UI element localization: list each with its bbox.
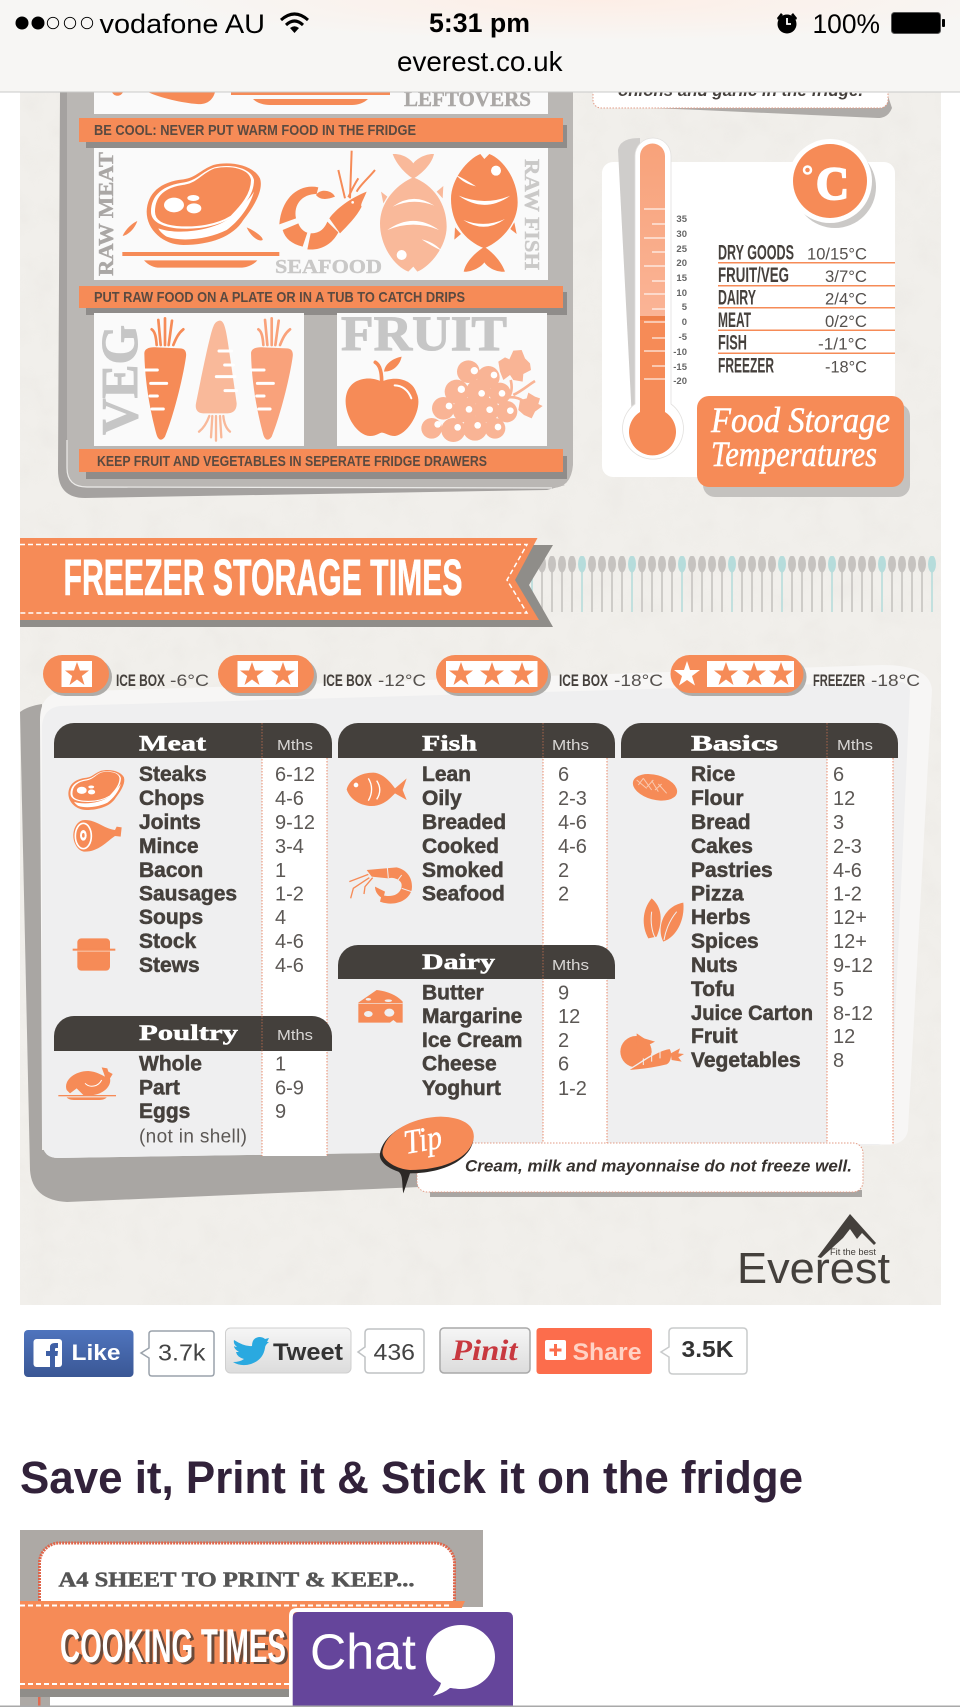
icon: herb leaves	[644, 898, 684, 942]
label ice box -18: -18°C	[614, 671, 663, 690]
fish items: Oily	[422, 787, 462, 810]
panel: freezer table backing shadow	[20, 704, 420, 1202]
header meat	[54, 723, 332, 758]
url: everest.co.uk	[397, 46, 563, 77]
scale labels: -20	[673, 376, 687, 387]
heading: save it: Save it, Print it & Stick it on the fridge	[20, 1452, 803, 1503]
scale labels: 0	[682, 317, 687, 328]
banner: freezer storage times: FREEZER STORAGE TIMES	[64, 549, 462, 606]
meat items: 9-12	[275, 812, 315, 834]
dotted card	[40, 1543, 454, 1610]
fish items: Smoked	[422, 859, 504, 882]
logo: everest: Everest	[737, 1244, 890, 1293]
icon: speech bubble	[426, 1625, 495, 1696]
meat items: Soups	[139, 906, 203, 929]
meat items: 4-6	[275, 788, 304, 810]
count: tweets: 436	[374, 1339, 415, 1365]
meat items: 3-4	[275, 836, 304, 858]
button: share: Share	[572, 1339, 642, 1366]
count: tweets	[358, 1329, 424, 1373]
icon: shrimp small	[349, 867, 412, 904]
thumbnail caption: A4 SHEET TO PRINT & KEEP...	[58, 1568, 414, 1592]
shelf 2: raw meat and fish panel	[94, 145, 548, 280]
basics items: Rice	[691, 763, 735, 786]
temperature table: -18°C	[825, 358, 867, 376]
dairy items: 1-2	[558, 1078, 587, 1100]
table: dairy	[338, 945, 615, 1100]
meat items: Stews	[139, 954, 200, 977]
panel: veg: VEG	[92, 325, 149, 435]
panel: veg	[92, 313, 304, 446]
strip: raw food	[79, 286, 563, 308]
header fish	[338, 723, 615, 758]
poultry items: 6-9	[275, 1078, 304, 1100]
temperature table: FISH	[718, 332, 747, 354]
basics items	[691, 763, 873, 1072]
table: meat	[54, 723, 332, 977]
basics items: Pastries	[691, 859, 773, 882]
decorative spoons row	[527, 556, 937, 612]
scale labels: 20	[676, 258, 687, 269]
scale labels: 30	[676, 229, 687, 240]
meat items: 1-2	[275, 884, 304, 906]
signal dots	[16, 16, 93, 30]
basics items: 4-6	[833, 860, 862, 882]
fish items: Breaded	[422, 811, 506, 834]
button: pin it	[440, 1328, 530, 1373]
meat items: Sausages	[139, 882, 237, 906]
browser status bar	[0, 0, 960, 92]
temperature table: 3/7°C	[825, 267, 867, 286]
icon: carrot 2 pale inverted	[196, 321, 237, 441]
dairy items: 6	[558, 1054, 569, 1076]
scale labels: 15	[676, 273, 688, 284]
temperature table: DRY GOODS	[718, 242, 794, 264]
scale labels: -10	[673, 347, 687, 358]
scale labels: 25	[676, 244, 688, 255]
dairy items: Yoghurt	[422, 1077, 501, 1100]
label ice box -12	[323, 671, 426, 690]
basics items: Vegetables	[691, 1049, 801, 1072]
strip shadow 3	[86, 456, 567, 479]
fish items: Cooked	[422, 835, 499, 858]
tip bubble	[380, 1117, 474, 1193]
header poultry: Poultry	[139, 1020, 238, 1045]
icon: battery	[892, 12, 945, 34]
meat items: 4-6	[275, 955, 304, 977]
title badge: food storage temperatures: Food Storage	[710, 400, 890, 440]
basics items: Bread	[691, 811, 751, 834]
header meat: Mths	[277, 737, 313, 754]
strip: raw food: PUT RAW FOOD ON A PLATE OR IN A TUB TO CATCH DRIPS	[94, 289, 465, 306]
basics items: 12	[833, 788, 855, 810]
scale labels: 5	[682, 302, 688, 313]
note card top right: onions and garlic in the fridge.	[618, 82, 863, 100]
strip: be cool: BE COOL: NEVER PUT WARM FOOD IN THE FRIDGE	[94, 122, 416, 139]
shelf 1: leftovers	[94, 87, 548, 114]
temperature table: 10/15°C	[807, 244, 867, 264]
strip shadow 2	[86, 292, 567, 315]
label freezer -18: -18°C	[871, 671, 920, 690]
icon: fish small	[347, 773, 407, 806]
star ratings legend	[43, 655, 920, 696]
basics items: 8-12	[833, 1003, 873, 1025]
icon: carrot 1	[144, 318, 186, 440]
header basics	[621, 723, 898, 758]
fish items: 4-6	[558, 812, 587, 834]
strip: keep fruit: KEEP FRUIT AND VEGETABLES IN SEPERATE FRIDGE DRAWERS	[97, 453, 487, 470]
icon: apple	[346, 357, 418, 436]
card	[602, 162, 895, 477]
poultry items: 1	[275, 1054, 286, 1076]
fish items: 2	[558, 884, 569, 906]
scale labels: -15	[673, 362, 688, 373]
poultry items	[139, 1052, 304, 1148]
star pill 3	[436, 655, 551, 696]
title badge: food storage temperatures	[697, 396, 910, 497]
fish items: 4-6	[558, 836, 587, 858]
count: shares: 3.5K	[682, 1336, 734, 1362]
header dairy: Dairy	[422, 949, 495, 974]
basics items: 9-12	[833, 955, 873, 977]
panel: fruit	[337, 305, 547, 446]
icon: cheese	[358, 990, 403, 1023]
star pill 2	[218, 655, 317, 696]
thumbnail banner: COOKING TIMES	[60, 1619, 286, 1672]
basics items: 12	[833, 1026, 855, 1048]
temperature table: FREEZER	[718, 354, 774, 378]
star pill 1	[43, 655, 112, 696]
fish items: Seafood	[422, 882, 505, 906]
label freezer -18: FREEZER	[813, 671, 865, 690]
basics items: Juice Carton	[691, 1002, 813, 1025]
header basics: Basics	[691, 730, 779, 756]
icon: thermometer	[618, 138, 684, 459]
basics items: Fruit	[691, 1025, 738, 1048]
button: facebook like: Like	[72, 1340, 120, 1365]
label ice box -12: -12°C	[378, 671, 426, 690]
label ice box -18: ICE BOX	[559, 671, 608, 690]
title badge: food storage temperatures: Temperatures	[711, 434, 877, 474]
panel: freezer tables sheet	[40, 665, 932, 1158]
basics items: 6	[833, 764, 844, 786]
dairy items: 12	[558, 1006, 580, 1028]
icon: orange fish	[451, 154, 518, 272]
label ice box -12: ICE BOX	[323, 671, 372, 690]
star pill 4	[670, 655, 806, 696]
vertical label raw fish: RAW FISH	[520, 159, 544, 270]
white month columns	[262, 723, 893, 1156]
temperature table: MEAT	[718, 309, 751, 332]
header dairy: Mths	[552, 957, 589, 974]
panel: fruit: FRUIT	[341, 305, 507, 361]
icon: alarm	[777, 13, 797, 34]
temperature table	[718, 242, 895, 378]
dairy items: Butter	[422, 982, 484, 1004]
vertical label raw meat: RAW MEAT	[94, 152, 118, 276]
label ice box -6: -6°C	[170, 671, 209, 690]
count: shares	[661, 1328, 747, 1374]
header fish: Fish	[422, 730, 477, 756]
basics items: Herbs	[691, 906, 751, 929]
tip note	[417, 1143, 863, 1197]
thumbnail: a4 sheet preview	[20, 1530, 483, 1706]
icon: shrimp	[279, 151, 375, 250]
basics items: 8	[833, 1050, 844, 1072]
meat items: Chops	[139, 787, 204, 810]
header poultry	[54, 1016, 332, 1051]
icon: celsius badge	[788, 139, 876, 228]
meat items: Stock	[139, 930, 197, 953]
table: basics	[620, 723, 898, 1072]
carrier: vodafone AU	[100, 9, 265, 39]
count: likes: 3.7k	[158, 1340, 206, 1366]
note card top right	[593, 80, 892, 118]
header dairy	[338, 945, 615, 979]
basics items: Tofu	[691, 978, 735, 1001]
button: share	[536, 1328, 652, 1374]
basics items: 2-3	[833, 836, 862, 858]
basics items: Pizza	[691, 882, 744, 906]
fish items	[422, 763, 587, 906]
basics items: 12+	[833, 931, 867, 953]
dairy items: Margarine	[422, 1005, 522, 1028]
scale labels	[673, 214, 688, 387]
button: pin it: Pinit	[451, 1334, 519, 1367]
icon: celsius badge: C	[816, 158, 849, 210]
strip shadow 1	[86, 125, 567, 148]
meat items: 4	[275, 907, 286, 929]
label ice box -6: ICE BOX	[116, 671, 165, 690]
meat items: 1	[275, 860, 286, 882]
banner: freezer storage times	[20, 538, 553, 627]
meat items	[139, 763, 315, 977]
social row	[24, 1328, 747, 1377]
tip note: Cream, milk and mayonnaise do not freeze well.	[465, 1158, 852, 1176]
meat items: Joints	[139, 811, 201, 834]
poultry items: Part	[139, 1076, 180, 1100]
poultry items: 9	[275, 1101, 286, 1123]
strip: be cool	[79, 118, 563, 142]
icon: bread	[630, 770, 680, 805]
meat items: Steaks	[139, 763, 207, 786]
logo: everest: Fit the best	[830, 1247, 877, 1257]
logo: everest	[737, 1214, 890, 1293]
poultry items: Eggs	[139, 1100, 190, 1123]
dairy items	[422, 982, 587, 1100]
button: tweet: Tweet	[273, 1339, 343, 1366]
count: likes	[141, 1331, 214, 1376]
basics items: Nuts	[691, 954, 738, 977]
basics items: 1-2	[833, 884, 862, 906]
meat items: 6-12	[275, 764, 315, 786]
paper background	[20, 92, 941, 1305]
basics items: 12+	[833, 907, 867, 929]
button: chat: Chat	[310, 1624, 416, 1680]
header meat: Meat	[139, 730, 207, 756]
icon: grapes	[421, 350, 543, 442]
label ice box -18	[559, 671, 663, 690]
meat items: 4-6	[275, 931, 304, 953]
tip label: Tip	[401, 1119, 445, 1162]
button: tweet	[226, 1328, 351, 1373]
header poultry: Mths	[277, 1027, 313, 1044]
temperature table: 0/2°C	[825, 312, 867, 331]
icon: steak small	[68, 770, 124, 810]
fish items: 6	[558, 764, 569, 786]
basics items: Flour	[691, 787, 744, 810]
basics items: 5	[833, 979, 844, 1001]
scale labels: -5	[679, 332, 688, 343]
basics items: 3	[833, 812, 844, 834]
battery percent: 100%	[812, 9, 880, 39]
icon: ham	[73, 820, 122, 852]
dairy items: 2	[558, 1030, 569, 1052]
fish items: 2	[558, 860, 569, 882]
basics items: Cakes	[691, 835, 753, 858]
meat items: Mince	[139, 835, 199, 858]
button: chat	[289, 1608, 513, 1707]
fish items: Lean	[422, 763, 471, 786]
shelf 1: leftovers: LEFTOVERS	[404, 87, 531, 111]
fish items: 2-3	[558, 788, 587, 810]
scale labels: 35	[676, 214, 688, 225]
dairy items: Ice Cream	[422, 1029, 522, 1052]
icon: roast chicken	[58, 1067, 116, 1100]
meat items: Bacon	[139, 859, 203, 882]
time: 5:31 pm	[429, 8, 530, 38]
table: poultry	[54, 1016, 332, 1148]
table: fish	[338, 723, 615, 906]
icon: pot	[73, 938, 115, 971]
poultry items: (not in shell)	[139, 1126, 247, 1148]
icon: steak on plate	[122, 163, 279, 268]
poultry items: Whole	[139, 1052, 202, 1076]
icon: carrot 3	[251, 318, 293, 440]
thumbnail banner: COOKING TIMES	[63, 1621, 289, 1674]
button: facebook like	[24, 1330, 134, 1377]
panel: fridge shelves tray	[58, 87, 573, 498]
scale labels: 10	[676, 288, 687, 299]
header fish: Mths	[552, 737, 589, 754]
callout: tip	[380, 1117, 863, 1197]
icon: pale fish	[380, 154, 447, 272]
temperature table: FRUIT/VEG	[718, 264, 789, 287]
header basics: Mths	[837, 737, 873, 754]
basics items: Spices	[691, 930, 759, 953]
panel: food storage temperatures	[602, 138, 910, 497]
icon: wifi	[281, 14, 308, 33]
thumbnail banner	[20, 1601, 465, 1697]
label seafood: SEAFOOD	[275, 256, 382, 278]
temperature table: -1/1°C	[818, 334, 867, 354]
temperature table: DAIRY	[718, 286, 756, 310]
temperature table: 2/4°C	[825, 290, 867, 308]
icon: tomato and carrot	[620, 1033, 684, 1071]
dairy items: Cheese	[422, 1052, 497, 1076]
dairy items: 9	[558, 982, 569, 1004]
